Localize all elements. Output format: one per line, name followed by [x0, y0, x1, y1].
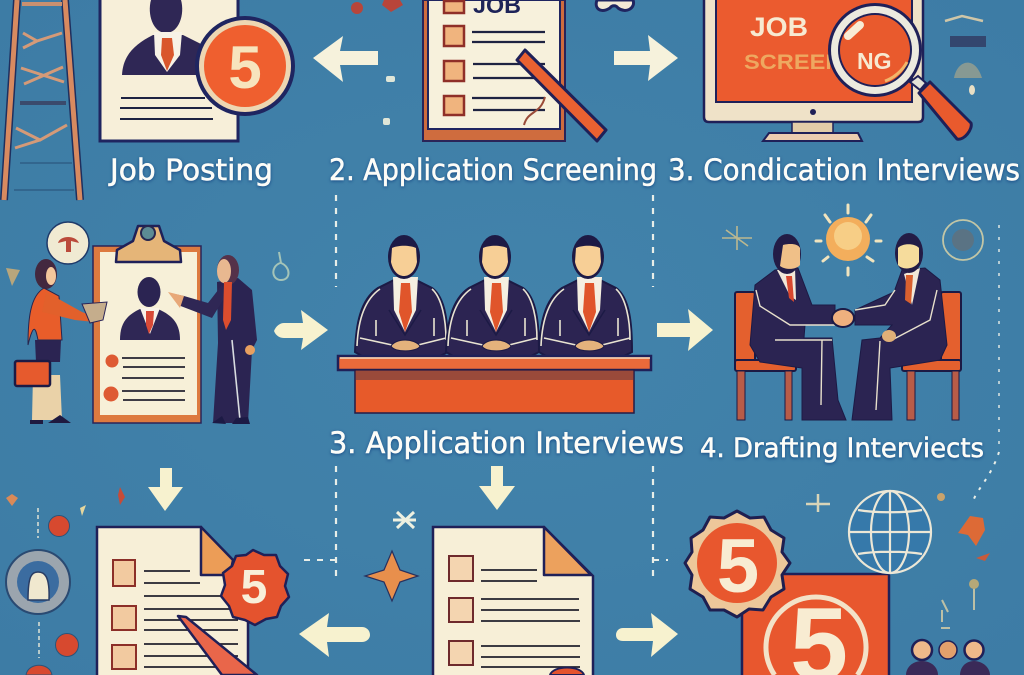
panelist 1 [355, 235, 448, 356]
checklist board [423, 0, 565, 141]
large number ring [766, 597, 866, 675]
list lines [104, 354, 185, 402]
icon: ladder [4, 0, 80, 200]
right man [852, 233, 947, 420]
monitor screen [716, 0, 912, 102]
icon: three small people [906, 640, 990, 675]
icon: globe [849, 491, 931, 573]
icon: star ornament [365, 551, 418, 601]
step: clipboard with two people [15, 222, 257, 424]
person silhouette [120, 277, 180, 340]
arrow: down centre [479, 466, 515, 510]
scalloped number badge [221, 550, 289, 625]
label: application screening: 2. Application Screening [329, 153, 657, 187]
icon: circular badge [47, 222, 89, 264]
step 3: job screening monitor [704, 0, 971, 141]
woman with briefcase [15, 259, 107, 424]
final step: offer card with seals [685, 511, 889, 675]
panelist 2 [446, 235, 539, 356]
scalloped seal [685, 511, 790, 617]
text lines [144, 571, 238, 667]
man in suit [168, 255, 257, 424]
panelist 3 [539, 235, 632, 356]
magnifying glass: NG [857, 48, 892, 74]
arrow: left from screening to posting [313, 36, 378, 82]
icon: small outline ornament [273, 252, 288, 280]
person silhouette [122, 0, 205, 75]
icon: small red ornaments top centre [351, 0, 403, 14]
step: handshake [735, 233, 961, 420]
icon: circular emblem right [943, 220, 983, 260]
checkboxes [444, 1, 464, 115]
text lines [481, 570, 580, 667]
icon: small ornaments right [806, 493, 990, 628]
step 2: application screening checklist [423, 0, 606, 141]
text lines [472, 32, 545, 110]
arrow: left bottom [299, 613, 370, 657]
step: interview panel at table [338, 235, 651, 413]
label: drafting interviects: 4. Drafting Interviects [700, 433, 984, 464]
left chair [735, 292, 796, 420]
partial badge [550, 668, 584, 675]
number badge: 5 [228, 34, 262, 101]
left man [750, 234, 846, 420]
clasped hands [832, 309, 854, 327]
label: job posting: Job Posting [108, 153, 273, 187]
monitor frame [704, 0, 923, 122]
checkboxes [112, 560, 136, 669]
arrow: right to monitor [614, 35, 678, 81]
pencil [517, 50, 606, 141]
dashed connectors [300, 195, 999, 582]
icons: small ornaments left [6, 268, 125, 658]
orange card [742, 574, 889, 675]
document sheet [97, 527, 248, 675]
right chair [902, 292, 961, 420]
step 1: job posting document [100, 0, 295, 141]
screen text: JOB [750, 12, 808, 42]
icon: gear emblem [6, 550, 70, 614]
folded corner [544, 527, 591, 575]
document sheet [433, 527, 593, 675]
step 3: job screening monitor: SCREENI [744, 51, 849, 74]
document sheet [100, 0, 238, 141]
text lines [120, 98, 213, 119]
table [338, 356, 651, 413]
stand [792, 122, 833, 134]
clip [116, 226, 181, 262]
icon: asterisk [393, 512, 416, 528]
label: application interviews: 3. Application Interviews [329, 426, 684, 460]
scalloped number badge: 5 [241, 561, 267, 614]
icons: red dots [26, 516, 78, 675]
checkboxes [449, 556, 473, 665]
folded corner [201, 527, 233, 575]
number badge [195, 16, 295, 116]
scalloped seal: 5 [717, 524, 759, 609]
icon: pale specks near screening [383, 76, 395, 125]
clipboard [93, 246, 201, 423]
pencil [178, 616, 257, 675]
step: drafted document with badge [97, 527, 289, 675]
arrow: right bottom [616, 613, 678, 657]
arrow: down left [148, 468, 183, 511]
icon: sun [816, 205, 881, 275]
icon: small ornament above arrow [596, 0, 634, 10]
icon: compass ornament [722, 226, 752, 250]
magnifying glass [828, 3, 971, 139]
arrow: clipboard to panel [274, 310, 328, 350]
icon: faint ornaments top right [945, 16, 986, 95]
arrow: panel to handshake [657, 309, 713, 351]
step: second document [433, 527, 593, 675]
